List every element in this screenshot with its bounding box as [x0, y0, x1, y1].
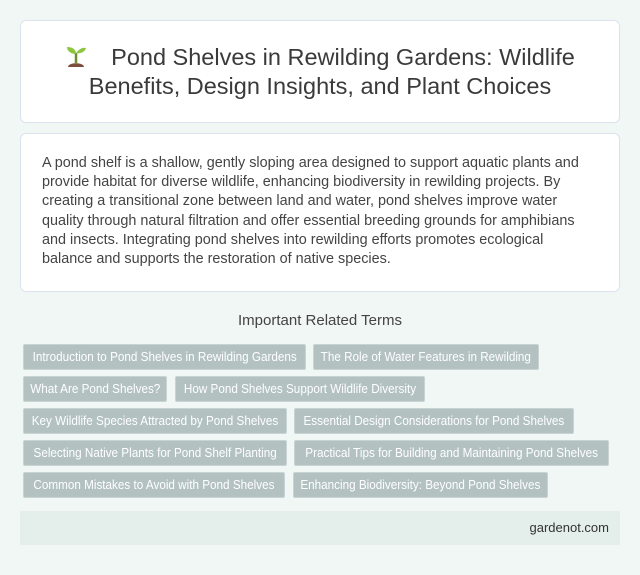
tag [313, 344, 539, 370]
tag: How Pond Shelves Support Wildlife Diversity [184, 381, 416, 396]
tag: What Are Pond Shelves? [30, 381, 160, 396]
tag: Enhancing Biodiversity: Beyond Pond Shelves [301, 477, 541, 492]
tag [23, 472, 285, 498]
title: Benefits, Design Insights, and Plant Choices [89, 73, 551, 99]
tag [23, 408, 287, 434]
tag: Key Wildlife Species Attracted by Pond Shelves [32, 413, 278, 428]
footer credit: gardenot.com [530, 520, 609, 535]
intro paragraph: A pond shelf is a shallow, gently sloping area designed to support aquatic plants and [42, 155, 579, 171]
tag [293, 472, 548, 498]
intro paragraph: quality through natural filtration and offer essential breeding grounds for amphibians [42, 213, 575, 229]
icon: seedling [67, 47, 86, 67]
tag: Practical Tips for Building and Maintaining Pond Shelves [305, 445, 598, 460]
section heading: Important Related Terms [238, 312, 402, 329]
title: Pond Shelves in Rewilding Gardens: Wildlife [111, 44, 575, 70]
tag [175, 376, 425, 402]
intro paragraph: creating a transitional zone between land and water, pond shelves improve water [42, 193, 557, 209]
tag [294, 440, 609, 466]
title [67, 44, 575, 99]
tag [23, 344, 306, 370]
tag: Introduction to Pond Shelves in Rewilding Gardens [32, 349, 297, 364]
intro paragraph [42, 155, 579, 267]
tag [23, 440, 287, 466]
tag [294, 408, 574, 434]
tag: Common Mistakes to Avoid with Pond Shelves [33, 477, 275, 492]
intro text card [20, 133, 620, 292]
footer [20, 511, 620, 545]
tag [23, 376, 167, 402]
header card [20, 20, 620, 123]
intro paragraph: provide habitat for diverse wildlife, enhancing biodiversity in rewilding projects. By [42, 174, 560, 190]
intro paragraph: balance and supports the restoration of native species. [42, 251, 391, 267]
tag: Essential Design Considerations for Pond Shelves [304, 413, 564, 428]
intro paragraph: and insects. Integrating pond shelves into rewilding efforts promotes ecological [42, 232, 543, 248]
tag: The Role of Water Features in Rewilding [321, 349, 531, 364]
tag: Selecting Native Plants for Pond Shelf Planting [33, 445, 277, 460]
